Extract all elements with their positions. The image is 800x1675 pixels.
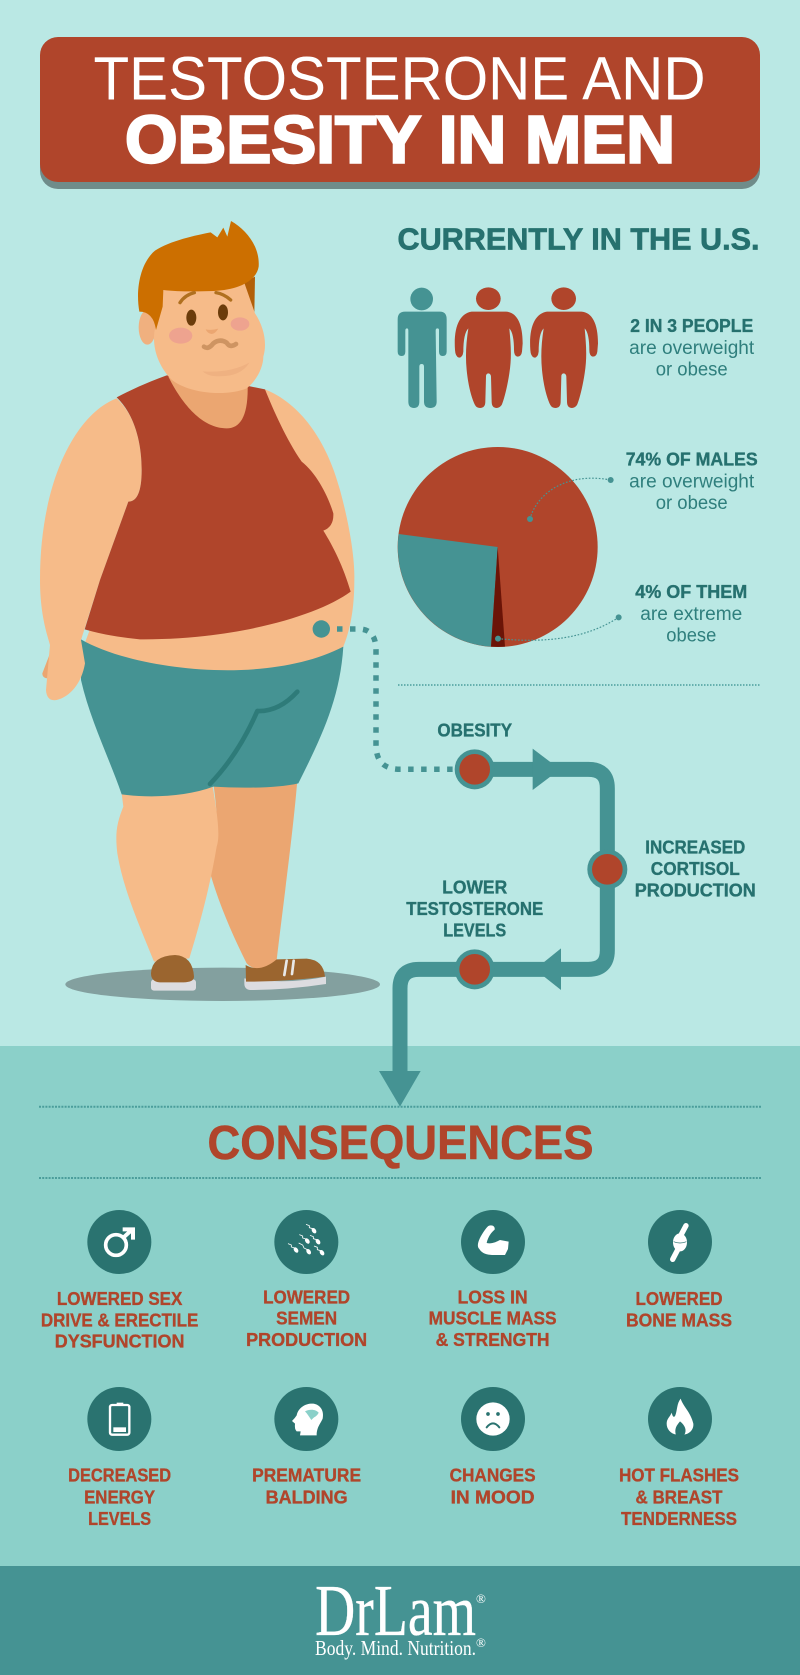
text: 2 in 3 people [629, 316, 755, 381]
consequence: hot flashes: TENDERNESS [621, 1509, 737, 1529]
text: 74% of males: or obese [656, 493, 728, 514]
icon: low battery [87, 1387, 151, 1451]
consequence: loss in muscle mass: MUSCLE MASS [429, 1309, 557, 1329]
consequence: decreased energy levels: ENERGY [84, 1487, 155, 1507]
face [154, 280, 265, 393]
label: obesity: OBESITY [437, 721, 512, 741]
shorts [81, 639, 343, 796]
text: 74% of males [626, 449, 758, 514]
consequence: decreased energy levels [68, 1387, 171, 1529]
consequences background band [0, 1046, 800, 1566]
consequence: changes in mood: CHANGES [450, 1466, 536, 1486]
consequence: hot flashes: & BREAST [636, 1487, 722, 1507]
consequence: lowered bone mass: LOWERED [636, 1289, 722, 1309]
arrow: left [535, 948, 561, 990]
logo: Dr Lam: DrLam [315, 1570, 476, 1651]
consequence: decreased energy levels: DECREASED [68, 1466, 171, 1486]
marker and dotted link from belly to flow [313, 620, 455, 769]
ear [139, 310, 156, 345]
text: 4% of them: are extreme [640, 604, 742, 625]
heading: consequences: CONSEQUENCES [208, 1117, 594, 1170]
text: 4% of them: obese [666, 626, 716, 647]
consequence: lowered sex drive: LOWERED SEX [57, 1289, 182, 1309]
node: testosterone [455, 949, 495, 989]
cheeks [169, 317, 249, 344]
text: 2 in 3 people: are overweight [629, 338, 755, 359]
text: 4% of them: 4% OF THEM [635, 582, 747, 602]
consequence: lowered bone mass: BONE MASS [626, 1310, 732, 1330]
arrow: down to consequences [379, 1071, 421, 1107]
flow path [400, 769, 607, 1073]
pictogram: 2 in 3 people [398, 287, 598, 408]
right shoe [244, 959, 326, 990]
consequence: decreased energy levels: LEVELS [88, 1509, 151, 1529]
icon: sad face [461, 1387, 525, 1451]
eyes [186, 304, 228, 326]
title line 1: TESTOSTERONE AND [94, 44, 706, 112]
consequence: hot flashes [619, 1387, 739, 1529]
neck [168, 377, 248, 428]
label: lower testosterone levels: TESTOSTERONE [406, 899, 543, 919]
consequence: lowered semen production: SEMEN [276, 1309, 337, 1329]
illustration: overweight man [40, 221, 380, 1001]
overweight person 2 [530, 287, 598, 408]
text: 2 in 3 people: 2 IN 3 PEOPLE [630, 316, 753, 336]
left arm and hand [40, 398, 142, 700]
consequence: loss in muscle mass [429, 1210, 557, 1350]
label: lower testosterone levels: LOWER [442, 877, 507, 897]
label: increased cortisol production: PRODUCTION [635, 881, 756, 901]
consequence: lowered semen production: PRODUCTION [246, 1330, 367, 1350]
consequence: premature balding: BALDING [266, 1487, 348, 1507]
node: cortisol [587, 849, 627, 889]
label: increased cortisol production: CORTISOL [651, 859, 740, 879]
callout connector: 74% [527, 477, 614, 522]
footer background band [0, 1566, 800, 1675]
torso skin and right arm [81, 389, 354, 687]
consequence: lowered bone mass [626, 1210, 732, 1330]
nose [206, 329, 218, 334]
normal person [398, 288, 447, 408]
ground shadow [65, 968, 380, 1001]
pie chart: male obesity [398, 447, 622, 647]
mouth [204, 341, 236, 348]
title line 2: OBESITY IN MEN [125, 104, 675, 178]
pie: extreme obese slice [491, 547, 505, 647]
consequence: lowered sex drive: DYSFUNCTION [55, 1332, 184, 1352]
label: lower testosterone levels [406, 877, 543, 940]
text: 74% of males: 74% OF MALES [626, 449, 758, 469]
title banner [40, 37, 760, 189]
icon: male symbol [87, 1210, 151, 1274]
pie: remaining slice [398, 534, 498, 647]
chin crease [203, 363, 249, 376]
label: lower testosterone levels: LEVELS [443, 920, 506, 940]
icon: bone joint [648, 1210, 712, 1274]
text: 74% of males: are overweight [629, 471, 755, 492]
icon: balding head [274, 1387, 338, 1451]
back leg [211, 780, 297, 969]
consequence: premature balding [252, 1387, 361, 1507]
consequence: changes in mood: IN MOOD [451, 1487, 535, 1507]
label: increased cortisol production: INCREASED [645, 837, 745, 857]
logo: Dr Lam: Body. Mind. Nutrition. [315, 1636, 476, 1660]
consequence: lowered sex drive: DRIVE & ERECTILE [41, 1310, 198, 1330]
node: obesity [455, 749, 495, 789]
hair [138, 221, 259, 330]
overweight person 1 [455, 287, 523, 408]
fingers [42, 653, 50, 678]
consequence: loss in muscle mass: LOSS IN [458, 1287, 528, 1307]
icon: flexed arm [461, 1210, 525, 1274]
consequence: premature balding: PREMATURE [252, 1466, 361, 1486]
front leg [116, 787, 218, 962]
consequence: lowered semen production: LOWERED [263, 1287, 350, 1307]
pie: overweight or obese slice [398, 447, 598, 647]
consequence: lowered sex drive [41, 1210, 198, 1352]
logo: Dr Lam: ® [476, 1591, 486, 1606]
consequence: hot flashes: HOT FLASHES [619, 1466, 739, 1486]
label: increased cortisol production [635, 837, 756, 901]
callout connector: 4% [495, 614, 622, 642]
back of hair [242, 277, 255, 314]
heading: currently in the U.S.: CURRENTLY IN THE U.S. [398, 221, 760, 256]
consequence: lowered semen production [246, 1210, 367, 1350]
flow diagram: obesity to lower testosterone [379, 749, 627, 1107]
consequence: changes in mood [450, 1387, 536, 1507]
arrow: right [533, 749, 560, 790]
eyebrows [180, 293, 231, 303]
shorts seam [210, 692, 297, 784]
icon: flame [648, 1387, 712, 1451]
logo: Dr Lam: ® [476, 1635, 486, 1650]
text: 4% of them [635, 582, 747, 647]
left shoe [151, 955, 196, 991]
consequence: loss in muscle mass: & STRENGTH [436, 1330, 550, 1350]
tank top [85, 375, 351, 639]
text: 2 in 3 people: or obese [656, 360, 728, 381]
icon: sperm cells [274, 1210, 338, 1274]
